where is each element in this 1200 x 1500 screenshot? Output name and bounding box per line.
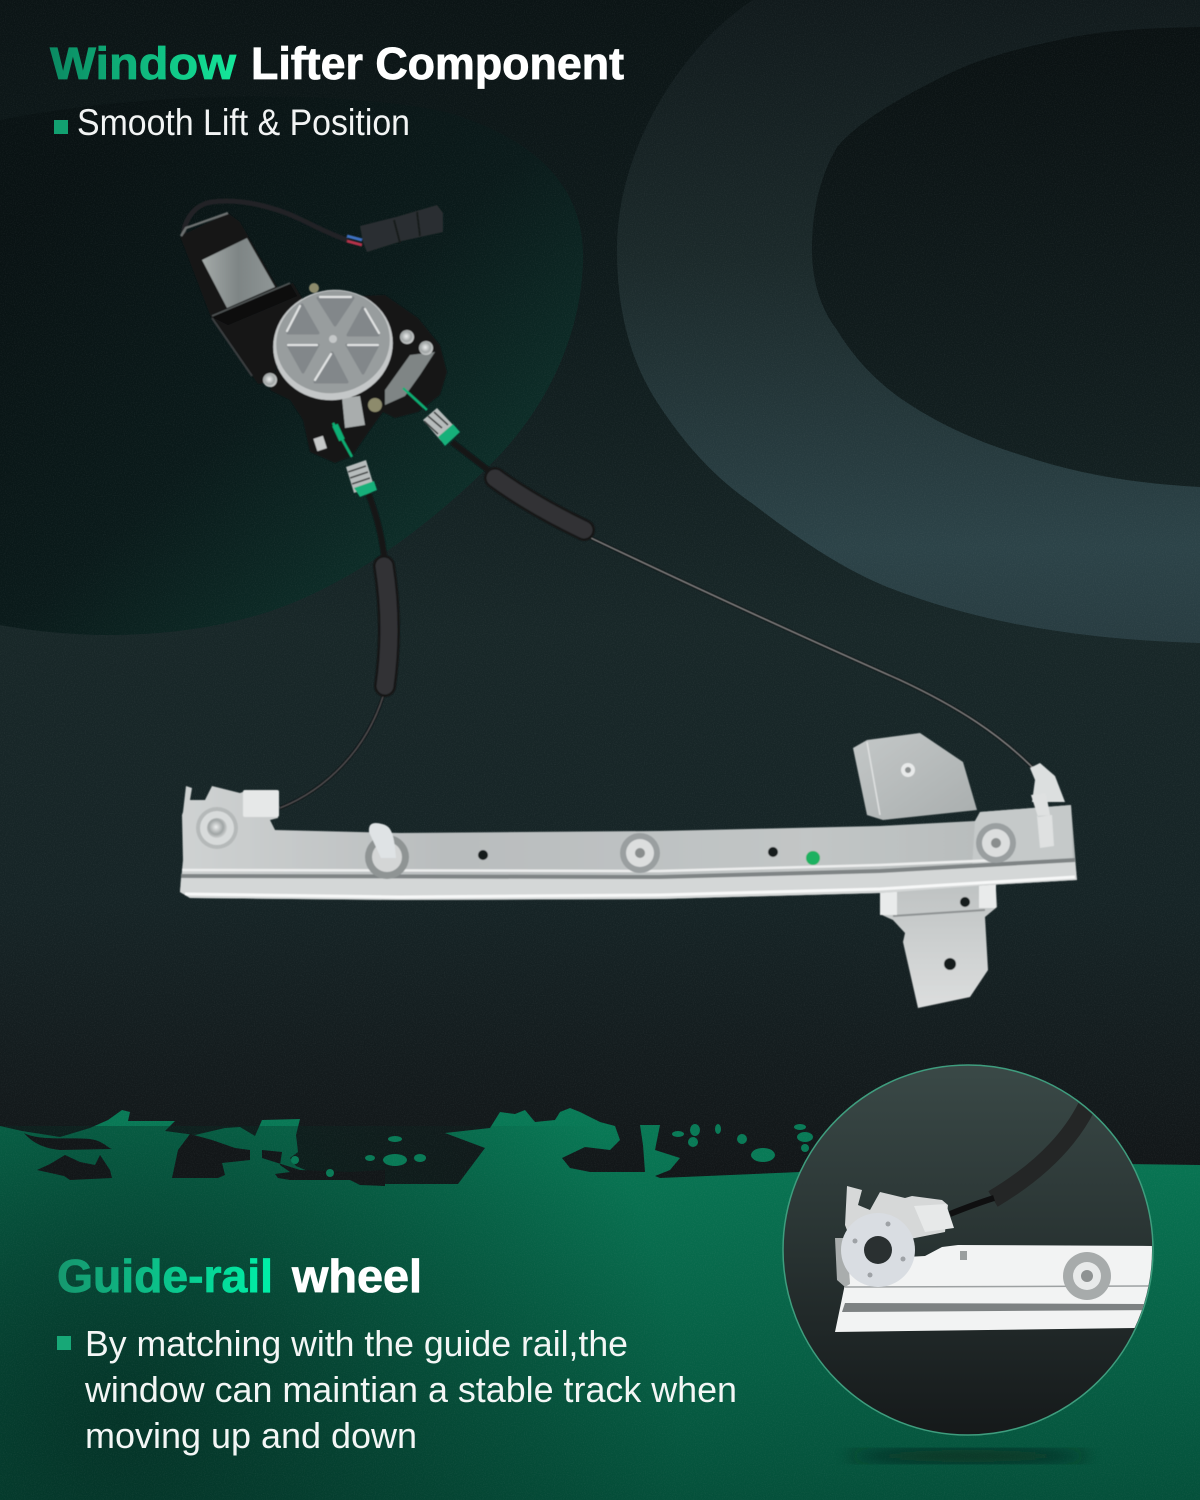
heading: guide-rail wheel: wheel (291, 1250, 422, 1302)
green paint splatter dots (291, 1124, 813, 1177)
end clip (1030, 763, 1065, 802)
shadow under circle (848, 1449, 1088, 1463)
gear cover disc (263, 279, 403, 411)
rivet close-up (1063, 1252, 1111, 1300)
motor housing (180, 213, 302, 384)
product: window regulator (180, 201, 1077, 1008)
green paint footer (0, 1108, 1200, 1500)
background: inner dark ellipse (812, 27, 1200, 487)
screw heads (400, 330, 414, 344)
description text with bullet: moving up and down (85, 1415, 417, 1456)
heading: guide-rail wheel: Guide-rail (57, 1250, 273, 1302)
motor and gearbox (180, 201, 447, 463)
plastic wheel (841, 1213, 915, 1287)
description text with bullet: By matching with the guide rail,the (85, 1323, 628, 1364)
rail lower channel (180, 861, 1077, 900)
green cable ends (333, 388, 460, 497)
cable: left, from motor to rail (280, 490, 389, 808)
cable: right, from motor to rail end (452, 442, 1033, 768)
description text with bullet: window can maintian a stable track when (84, 1369, 737, 1410)
rail close-up (835, 1245, 1160, 1332)
background: dark left blob (0, 96, 583, 635)
title (50, 38, 624, 89)
rail holes (478, 850, 488, 860)
connector (360, 205, 443, 252)
subtitle with bullet: Smooth Lift & Position (77, 102, 410, 143)
description text with bullet (57, 1323, 737, 1456)
motor can (202, 238, 275, 308)
lower bracket (880, 873, 997, 1008)
upper bracket (853, 733, 977, 820)
clip (914, 1204, 954, 1232)
wire harness (183, 201, 347, 240)
green dot (806, 851, 820, 865)
gearbox body (270, 295, 447, 463)
title: Window (50, 38, 237, 89)
dark paint holes (24, 1133, 385, 1186)
rail body (180, 786, 1077, 900)
springs (346, 460, 374, 493)
circular detail view (783, 1065, 1160, 1435)
background: crescent band (617, 0, 1200, 643)
guide rail (180, 733, 1077, 1008)
heading: guide-rail wheel (57, 1250, 422, 1302)
rivets and stud (196, 807, 238, 849)
wheel clip (243, 790, 279, 817)
title: Lifter Component (251, 38, 624, 89)
tube cable (993, 1106, 1087, 1199)
